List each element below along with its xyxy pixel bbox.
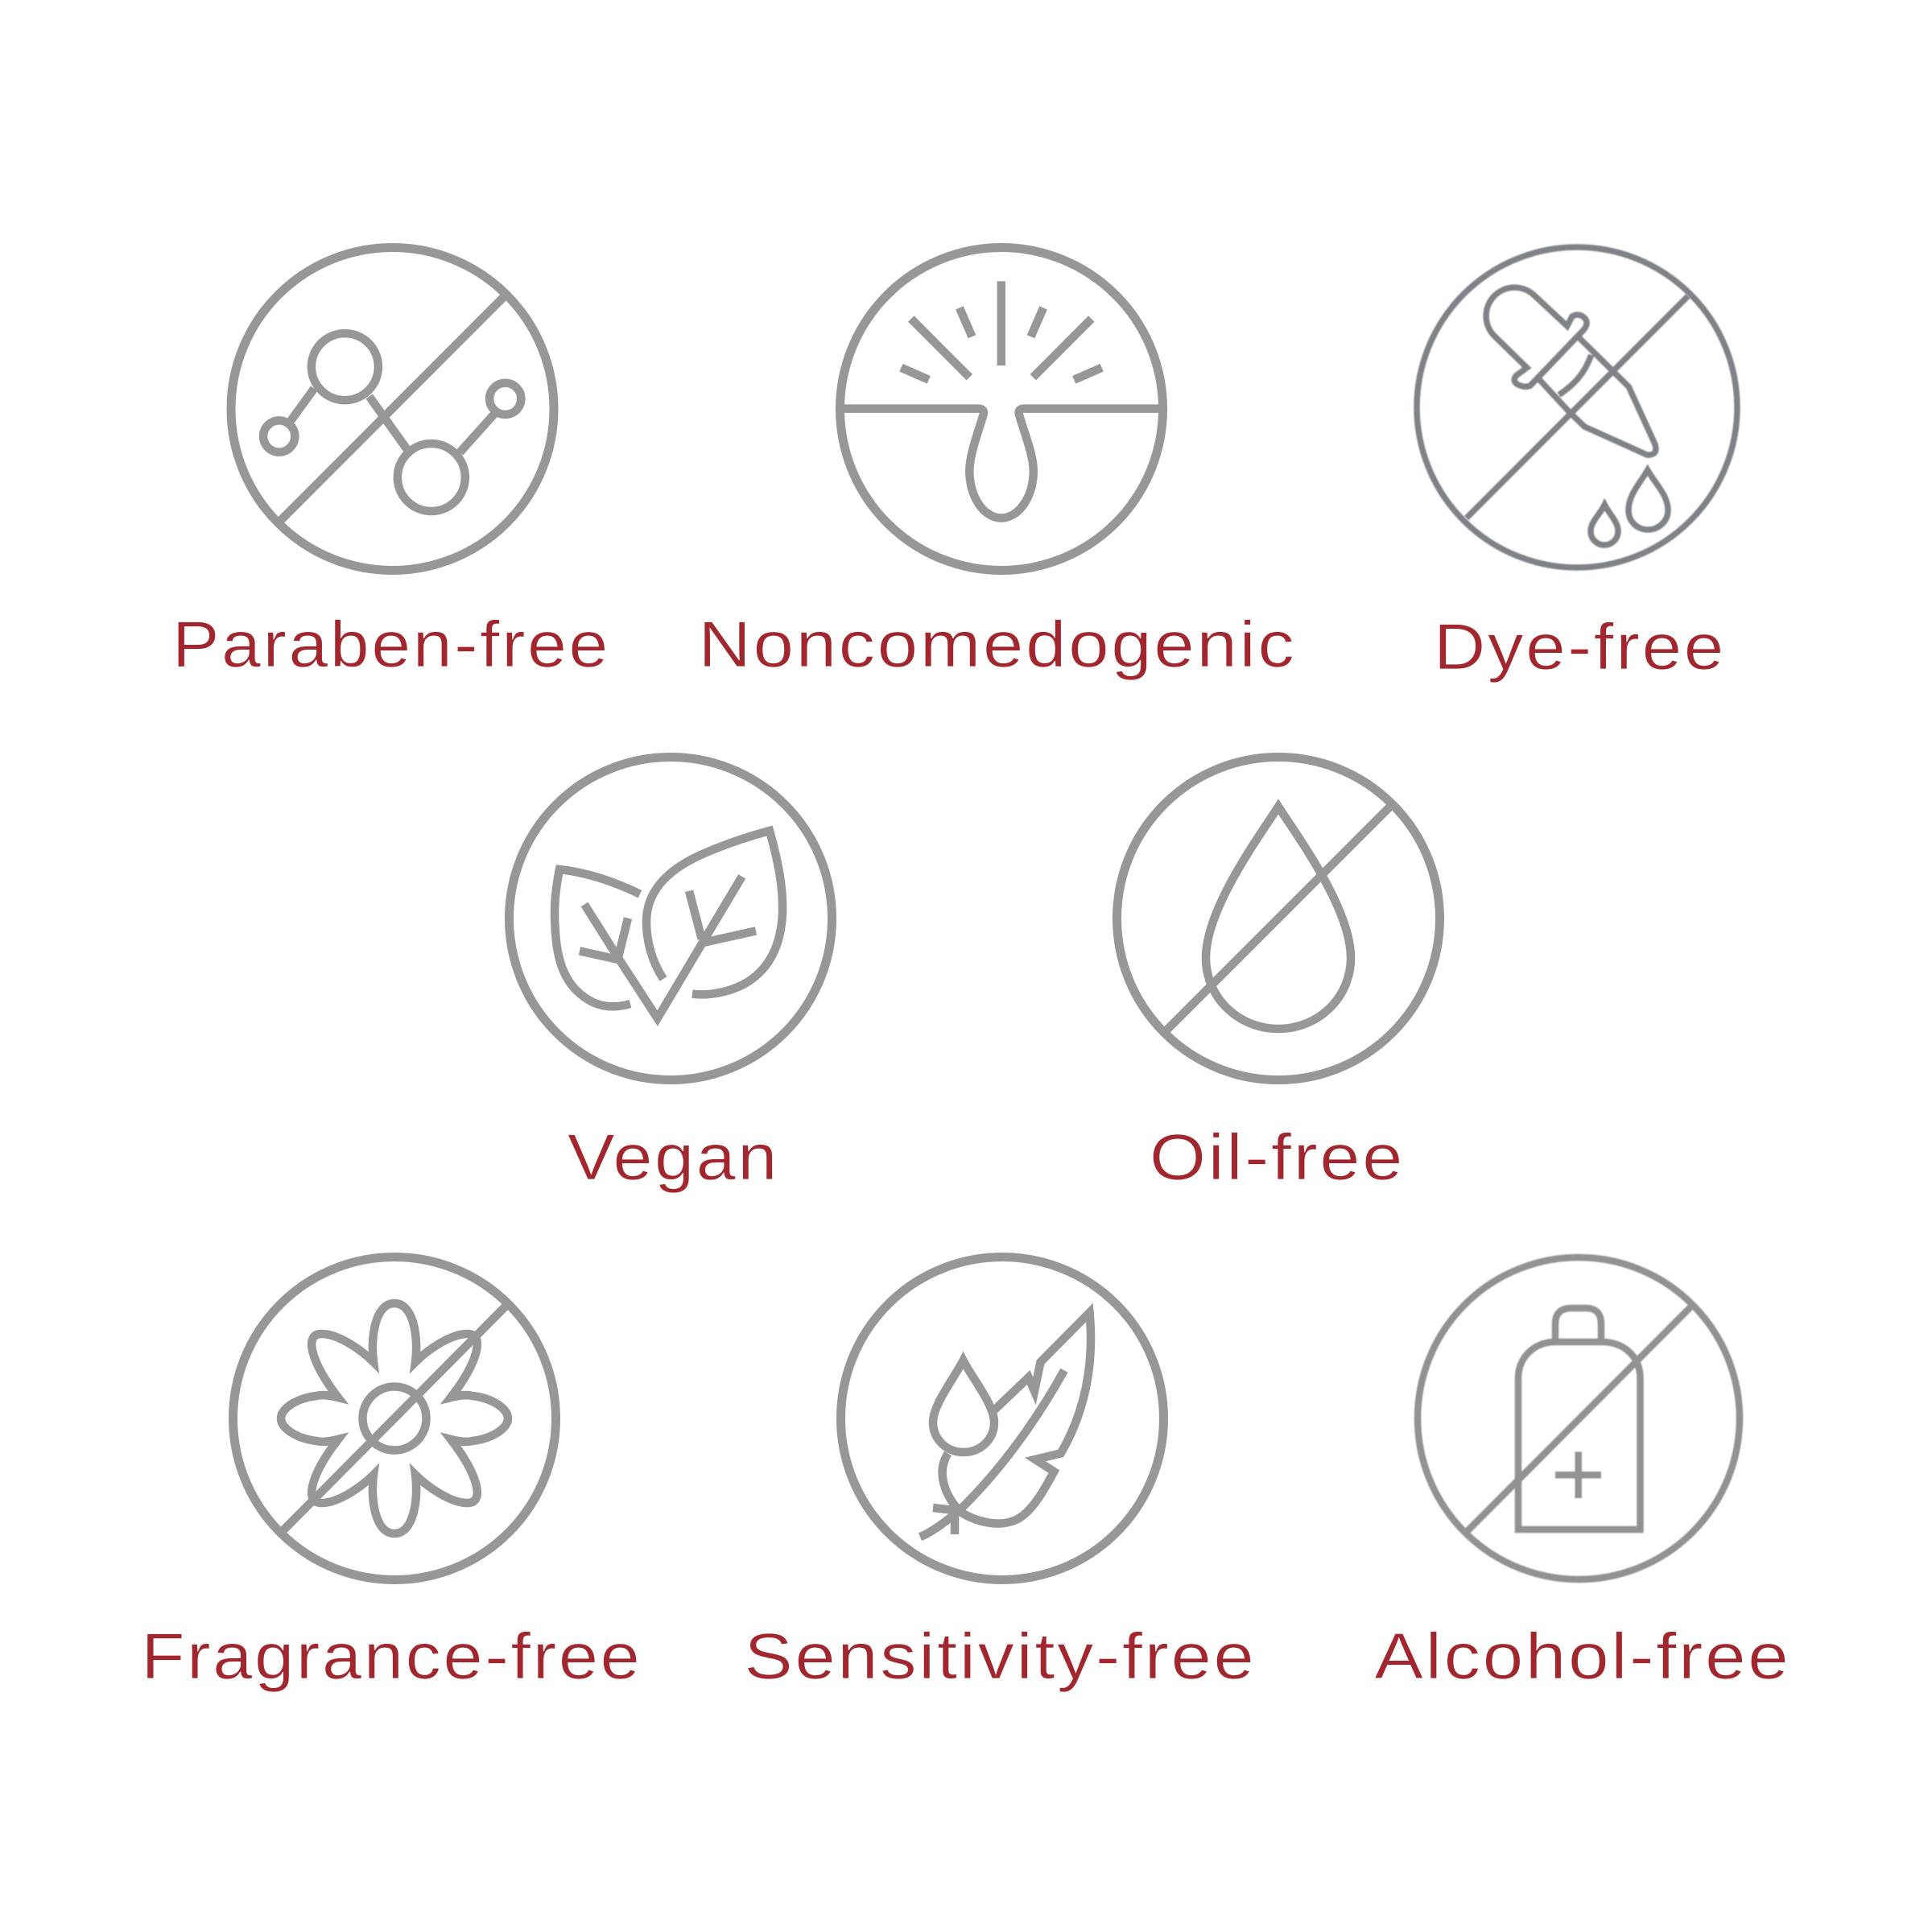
label: Noncomedogenic: Noncomedogenic — [699, 609, 1296, 681]
panel: vegan — [509, 757, 832, 1194]
icon: drop and feather — [840, 1257, 1164, 1579]
panel: sensitivity-free — [744, 1257, 1256, 1693]
label: Sensitivity-free: Sensitivity-free — [744, 1620, 1256, 1693]
icon: two leaves — [509, 757, 832, 1080]
icon: dropper crossed out — [1417, 247, 1737, 568]
label: Vegan: Vegan — [568, 1121, 779, 1194]
label: Alcohol-free: Alcohol-free — [1375, 1620, 1790, 1693]
panel: dye-free — [1417, 247, 1737, 683]
icon: flower crossed out — [233, 1257, 555, 1579]
label: Fragrance-free: Fragrance-free — [142, 1620, 642, 1693]
label: Paraben-free: Paraben-free — [172, 609, 610, 681]
label: Dye-free: Dye-free — [1434, 611, 1726, 683]
icon: clear pore with rays — [840, 248, 1163, 570]
panel: oil-free — [1117, 757, 1439, 1194]
panel: paraben-free — [172, 248, 610, 681]
icon: bottle crossed out — [1418, 1257, 1740, 1579]
panel: alcohol-free — [1375, 1257, 1790, 1693]
panel: fragrance-free — [142, 1257, 642, 1693]
panel: noncomedogenic — [699, 248, 1296, 681]
icon: molecule crossed out — [231, 248, 554, 570]
icon: oil drop crossed out — [1117, 757, 1439, 1080]
label: Oil-free: Oil-free — [1150, 1121, 1405, 1194]
